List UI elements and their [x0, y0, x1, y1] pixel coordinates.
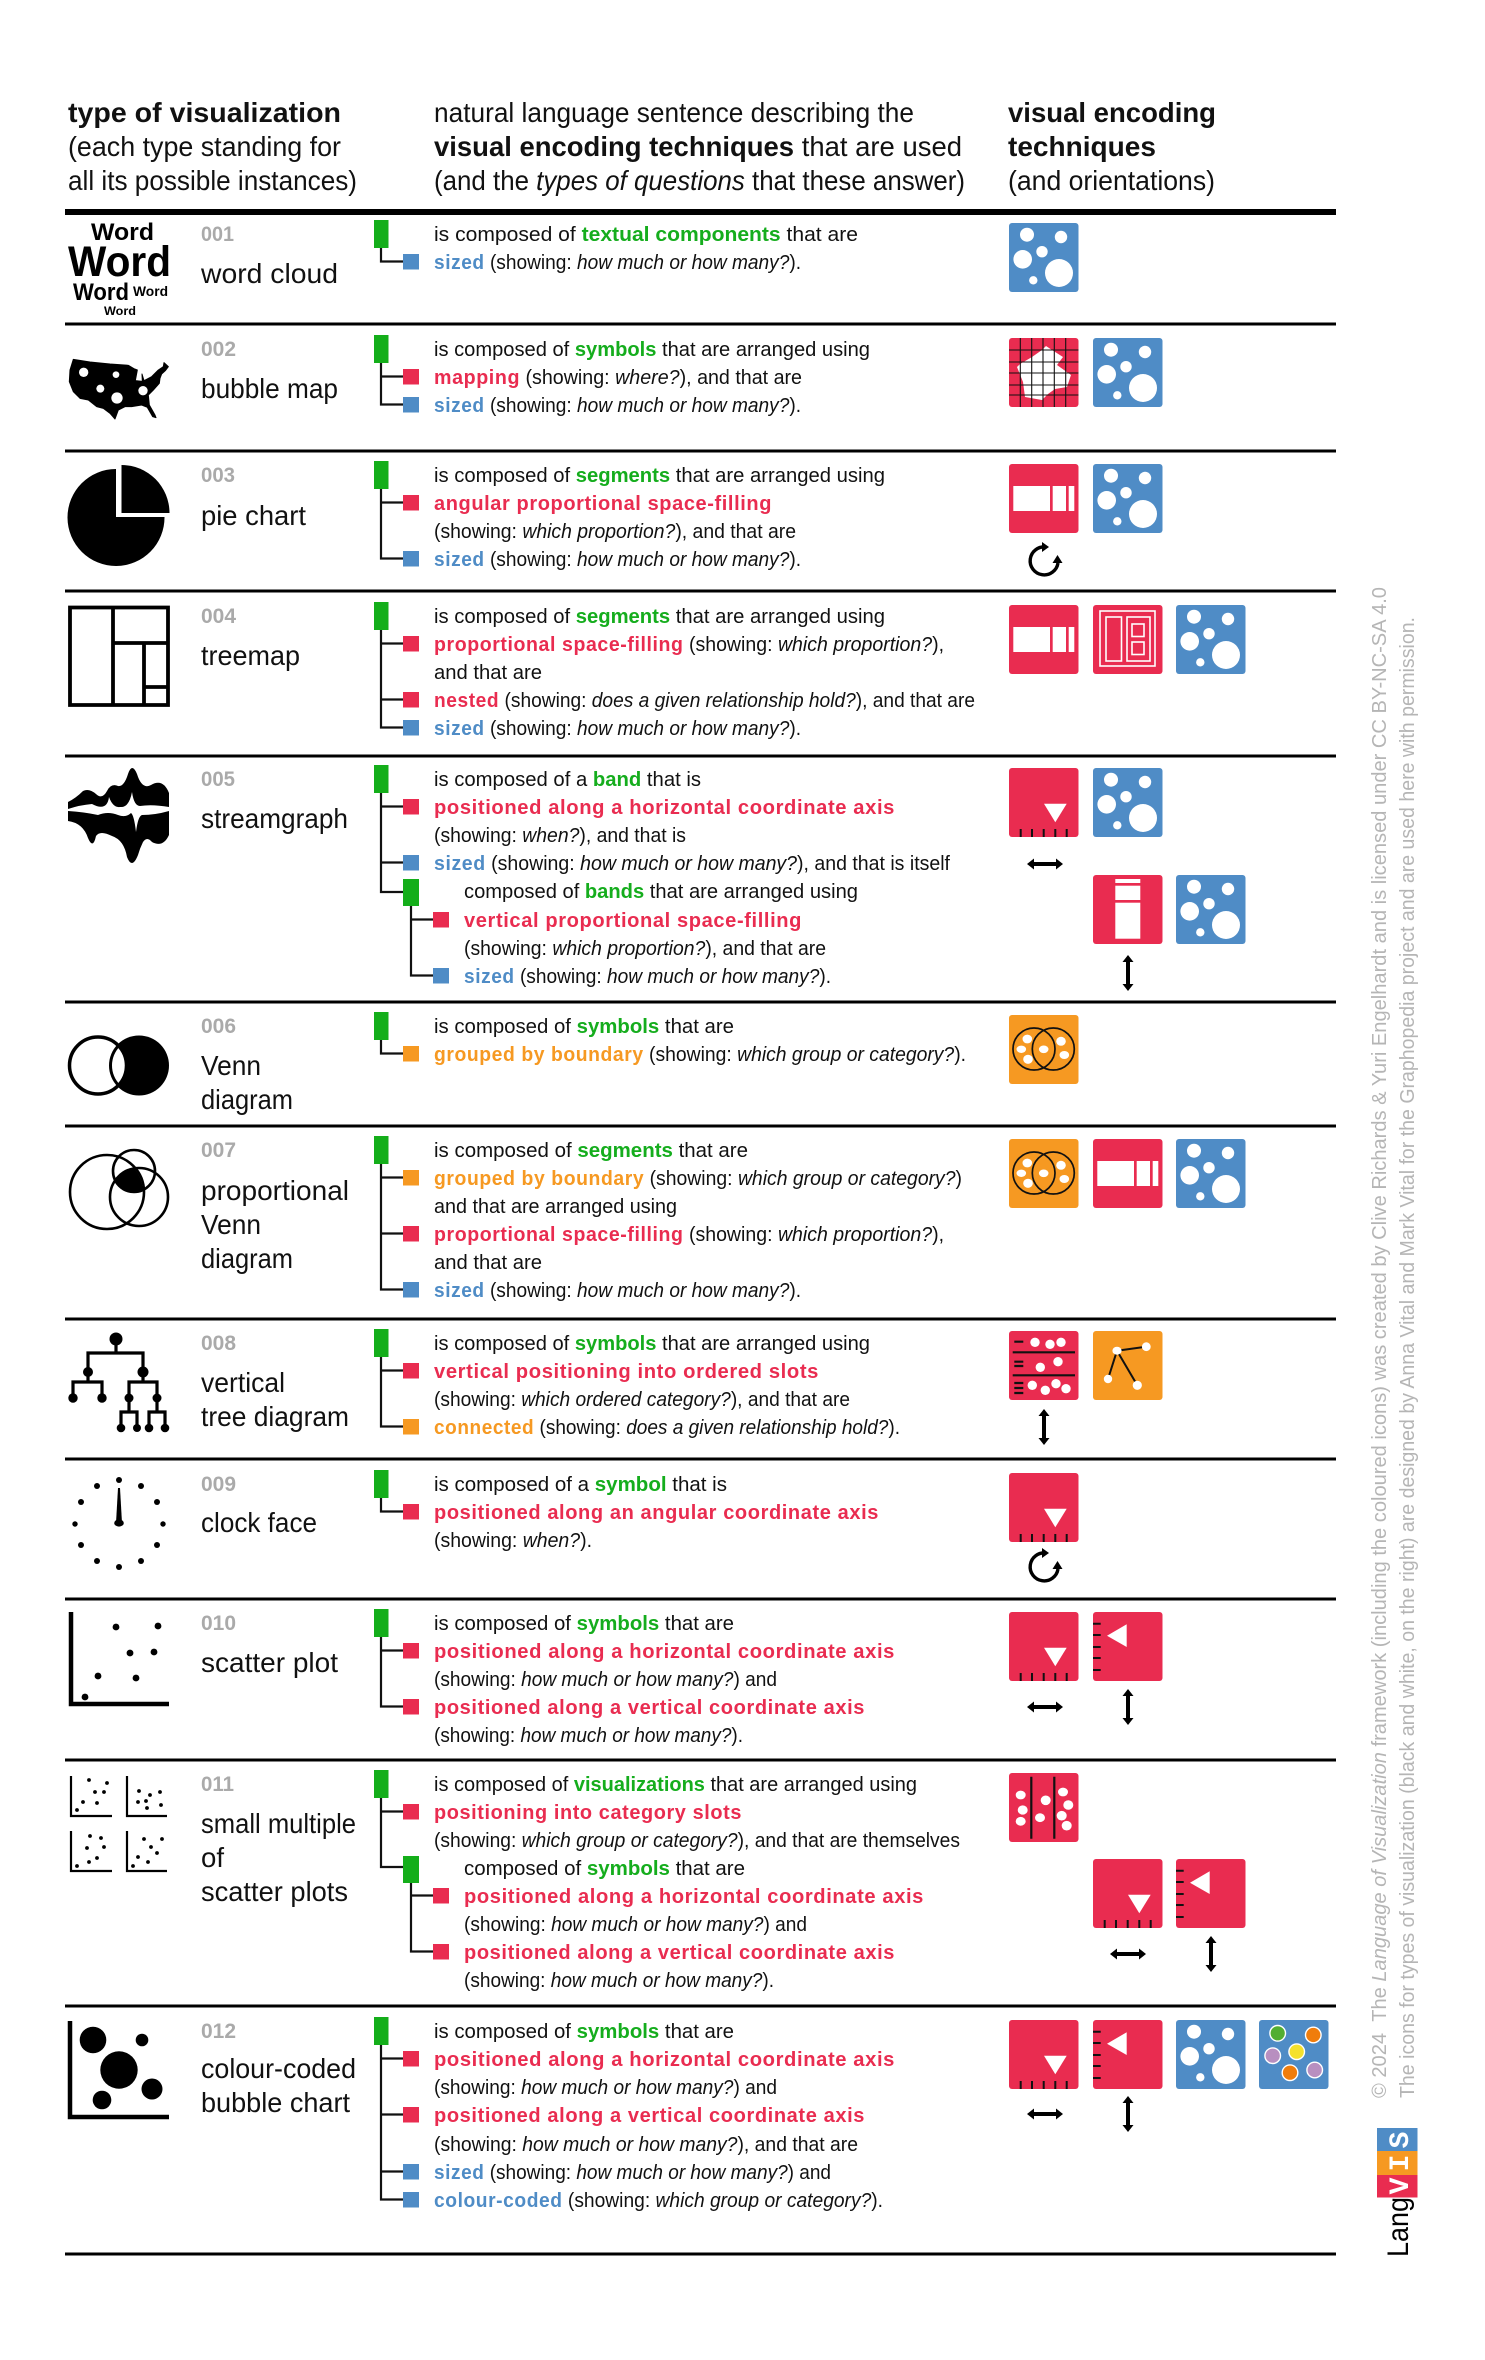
name: vertical tree diagram: [201, 1367, 349, 1432]
encoding icon: sized: [1009, 223, 1078, 292]
sentence: is composed of symbols that are arranged using: [434, 1333, 870, 1355]
sentence: (showing: when?).: [434, 1530, 592, 1552]
sentence: (showing: how much or how many?) and: [434, 1669, 777, 1691]
name: colour-coded bubble chart: bubble chart: [201, 2087, 350, 2118]
icon: clock face: [72, 1477, 166, 1570]
icon: word cloud: Word: [68, 238, 171, 286]
sentence: grouped by boundary (showing: which group or category?): [434, 1168, 962, 1190]
sentence: (showing: when?), and that is: [434, 825, 686, 847]
number 005: 005: [201, 768, 235, 791]
sentence: positioned along a vertical coordinate axis: [464, 1942, 895, 1964]
sentence: sized (showing: how much or how many?).: [434, 252, 801, 274]
icon: pie chart: [68, 465, 170, 566]
encoding tree: [374, 2017, 419, 2208]
encoding tree: [374, 1136, 419, 1298]
encoding tree: [374, 1012, 419, 1062]
sentence: [434, 1140, 962, 1302]
sentence: is composed of visualizations that are arranged using: [434, 1774, 917, 1796]
sentence: (showing: how much or how many?) and: [464, 1914, 807, 1936]
header: natural language sentence: (and the types of questions that these answer): [434, 165, 965, 196]
row 003: pie chart: [68, 461, 1163, 575]
orientation: horizontal: [1110, 1948, 1146, 1960]
sentence: connected (showing: does a given relationship hold?).: [434, 1417, 900, 1439]
icon: Venn diagram: [70, 1036, 169, 1096]
sentence: (showing: which proportion?), and that are: [434, 521, 796, 543]
encoding icon: sized: [1176, 1139, 1246, 1208]
icon: small multiples: [71, 1776, 167, 1871]
name: pie chart: pie chart: [201, 500, 306, 531]
sentence: (showing: how much or how many?).: [434, 1725, 743, 1747]
icon: word cloud: Word: [73, 279, 129, 306]
row 005: streamgraph: [68, 765, 1246, 991]
sentence: and that are: [434, 1252, 542, 1274]
encoding icon: category slots: [1009, 1773, 1078, 1842]
header: visual encoding techniques: techniques: [1008, 131, 1156, 162]
encoding icon: vertical proportional: [1093, 875, 1162, 944]
sentence: is composed of a symbol that is: [434, 1474, 727, 1496]
credits: copyright sidebar: [1369, 587, 1419, 2098]
name: small multiple of scatter plots: of: [201, 1842, 224, 1873]
row 004: treemap: [70, 602, 1246, 740]
name: Venn diagram: [201, 1050, 293, 1115]
encoding tree: [374, 461, 419, 566]
sentence: proportional space-filling (showing: which proportion?),: [434, 634, 944, 656]
icon: vertical tree: [68, 1332, 169, 1432]
icon: scatter plot: [71, 1612, 169, 1704]
sentence: angular proportional space-filling: [434, 493, 772, 515]
name: Venn diagram: diagram: [201, 1084, 293, 1115]
logo: LangVIS: S: [1386, 2132, 1417, 2148]
logo: LangVIS: V: [1386, 2177, 1417, 2194]
name: clock face: clock face: [201, 1507, 317, 1538]
icon: proportional Venn diagram: [70, 1150, 168, 1229]
number 007: 007: [201, 1139, 236, 1162]
sentence: sized (showing: how much or how many?).: [434, 549, 801, 571]
encoding icon: boundary: [1009, 1139, 1078, 1208]
sentence: mapping (showing: where?), and that are: [434, 367, 802, 389]
sentence: (showing: which group or category?), and that are themselves: [434, 1830, 960, 1852]
number 010: 010: [201, 1612, 236, 1635]
icon: word cloud: [68, 219, 171, 318]
header: natural language sentence: natural language sentence describing the: [434, 97, 914, 128]
icon: word cloud: Word: [104, 304, 136, 318]
encoding icon: sized: [1176, 2020, 1246, 2089]
sentence: positioning into category slots: [434, 1802, 742, 1824]
sentence: [434, 606, 975, 740]
row 007: proportional Venn diagram: [70, 1136, 1246, 1302]
encoding icon: horizontal position: [1009, 1612, 1078, 1681]
sentence: sized (showing: how much or how many?).: [464, 966, 831, 988]
encoding icon: sized: [1176, 605, 1246, 674]
number 009: 009: [201, 1473, 236, 1496]
encoding icon: vertical position: [1093, 1612, 1162, 1681]
encoding icon: nested: [1093, 605, 1162, 674]
name: vertical tree diagram: tree diagram: [201, 1401, 349, 1432]
row 006: Venn diagram: [70, 1012, 1078, 1115]
logo: LangVIS: I: [1386, 2155, 1417, 2171]
encoding icon: position: [1009, 1473, 1078, 1542]
name: proportional Venn diagram: proportional: [201, 1175, 349, 1206]
sentence: is composed of segments that are: [434, 1140, 748, 1162]
encoding icon: colour-coded: [1259, 2020, 1328, 2089]
header: visual encoding techniques: visual encoding: [1008, 97, 1216, 128]
encoding icon: vertical position: [1176, 1859, 1246, 1928]
encoding icon: mapping: [1009, 338, 1078, 407]
sentence: is composed of symbols that are arranged using: [434, 339, 870, 361]
sentence: is composed of segments that are arranged using: [434, 465, 885, 487]
sentence: [434, 1613, 895, 1747]
icon: word cloud: Word: [91, 219, 154, 246]
orientation: angular: [1030, 1548, 1062, 1581]
name: vertical tree diagram: vertical: [201, 1367, 285, 1398]
sentence: is composed of segments that are arranged using: [434, 606, 885, 628]
icon: streamgraph: [68, 768, 169, 863]
sentence: is composed of a band that is: [434, 769, 701, 791]
encoding icon: connected: [1093, 1331, 1162, 1400]
sentence: grouped by boundary (showing: which group or category?).: [434, 1044, 966, 1066]
sentence: sized (showing: how much or how many?).: [434, 1280, 801, 1302]
name: proportional Venn diagram: diagram: [201, 1243, 293, 1274]
encoding tree: [374, 1609, 419, 1714]
encoding tree: [374, 1770, 449, 1960]
name: colour-coded bubble chart: colour-coded: [201, 2053, 356, 2084]
credits: copyright sidebar: © 2024 The Language of Visualization framework (including the coloured icons) was created by Clive Richards & Yuri Engelhardt and is licensed under CC BY-NC-SA 4.0: [1369, 587, 1391, 2098]
sentence: [434, 1474, 879, 1552]
sentence: is composed of symbols that are: [434, 1613, 734, 1635]
sentence: sized (showing: how much or how many?), and that is itself: [434, 853, 950, 875]
orientation: vertical: [1122, 1689, 1134, 1725]
name: colour-coded bubble chart: [201, 2053, 356, 2118]
sentence: nested (showing: does a given relationship hold?), and that are: [434, 690, 975, 712]
sentence: positioned along a vertical coordinate axis: [434, 2105, 865, 2127]
sentence: vertical proportional space-filling: [464, 910, 802, 932]
header: type of visualization: [68, 97, 357, 196]
encoding icon: sized: [1093, 338, 1162, 407]
sentence: (showing: which ordered category?), and that are: [434, 1389, 850, 1411]
encoding icon: horizontal position: [1093, 1859, 1162, 1928]
sentence: positioned along a horizontal coordinate axis: [434, 2049, 895, 2071]
encoding icon: vertical position: [1093, 2020, 1162, 2089]
sentence: and that are: [434, 662, 542, 684]
row 002: bubble map: [69, 335, 1162, 419]
orientation: angular: [1030, 542, 1062, 575]
encoding icon: sized: [1176, 875, 1246, 944]
name: bubble map: bubble map: [201, 373, 338, 404]
sentence: colour-coded (showing: which group or category?).: [434, 2190, 883, 2212]
sentence: [434, 1774, 960, 1992]
name: small multiple of scatter plots: scatter plots: [201, 1876, 348, 1907]
sentence: sized (showing: how much or how many?).: [434, 395, 801, 417]
encoding icon: horizontal position: [1009, 768, 1078, 837]
row 010: scatter plot: [71, 1609, 1162, 1747]
row 008: vertical tree diagram: [68, 1329, 1162, 1445]
header: type of visualization: (each type standing for: [68, 131, 341, 162]
encoding icon: proportional segments: [1009, 605, 1078, 674]
sentence: [434, 1333, 900, 1439]
sentence: (showing: how much or how many?), and that are: [434, 2134, 858, 2156]
name: scatter plot: scatter plot: [201, 1647, 338, 1678]
row 009: clock face: [72, 1470, 1079, 1581]
encoding icon: sized: [1093, 464, 1162, 533]
sentence: positioned along a horizontal coordinate axis: [434, 797, 895, 819]
orientation: horizontal: [1027, 858, 1063, 870]
number 012: 012: [201, 2020, 236, 2043]
sentence: vertical positioning into ordered slots: [434, 1361, 819, 1383]
number 001: 001: [201, 223, 234, 246]
encoding icon: proportional segments: [1009, 464, 1078, 533]
header: natural language sentence: visual encoding techniques that are used: [434, 131, 962, 162]
logo: LangVIS: [1377, 2128, 1418, 2257]
orientation: vertical: [1122, 2096, 1134, 2132]
number 008: 008: [201, 1332, 236, 1355]
sentence: composed of symbols that are: [464, 1858, 745, 1880]
encoding icon: proportional segments: [1093, 1139, 1162, 1208]
icon: bubble map: [69, 359, 168, 419]
encoding tree: [374, 765, 449, 984]
sentence: [434, 1016, 966, 1066]
sentence: positioned along a horizontal coordinate axis: [464, 1886, 924, 1908]
icon: treemap: [70, 608, 168, 705]
header: visual encoding techniques: (and orientations): [1008, 165, 1215, 196]
sentence: (showing: how much or how many?).: [464, 1970, 774, 1992]
sentence: [434, 339, 870, 417]
encoding icon: horizontal position: [1009, 2020, 1078, 2089]
encoding icon: sized: [1093, 768, 1162, 837]
sentence: positioned along a horizontal coordinate axis: [434, 1641, 895, 1663]
number 011: 011: [201, 1773, 234, 1796]
sentence: [434, 769, 950, 988]
header: type of visualization: all its possible instances): [68, 165, 357, 196]
credits: copyright sidebar: The icons for types of visualization (black and white, on the right) are designed by Anna Vital and Mark Vital for the Graphopedia project and are used here with permission.: [1397, 617, 1419, 2098]
name: streamgraph: streamgraph: [201, 803, 348, 834]
number 006: 006: [201, 1015, 236, 1038]
orientation: horizontal: [1027, 1702, 1063, 1712]
sentence: (showing: how much or how many?) and: [434, 2077, 777, 2099]
icon: word cloud: Word: [133, 283, 168, 299]
encoding tree: [374, 602, 419, 736]
header: visual encoding techniques: [1008, 97, 1216, 196]
row 012: colour-coded bubble chart: [70, 2017, 1328, 2212]
encoding tree: [374, 220, 419, 270]
name: proportional Venn diagram: Venn: [201, 1209, 261, 1240]
encoding tree: [374, 1329, 419, 1434]
icon: bubble chart: [70, 2021, 169, 2117]
orientation: vertical: [1038, 1409, 1050, 1445]
sentence: [434, 2021, 895, 2212]
sentence: [434, 224, 858, 274]
name: treemap: treemap: [201, 640, 300, 671]
number 003: 003: [201, 464, 235, 487]
sentence: is composed of symbols that are: [434, 2021, 734, 2043]
encoding tree: [374, 1470, 419, 1520]
sentence: positioned along a vertical coordinate axis: [434, 1697, 865, 1719]
sentence: sized (showing: how much or how many?).: [434, 718, 801, 740]
orientation: vertical: [1122, 955, 1134, 991]
sentence: composed of bands that are arranged using: [464, 881, 858, 903]
row 011: small multiple of scatter plots: [71, 1770, 1246, 1992]
header: type of visualization: type of visualization: [68, 97, 341, 128]
sentence: is composed of textual components that are: [434, 224, 858, 246]
header: natural language sentence: [434, 97, 965, 196]
orientation: vertical: [1206, 1936, 1216, 1972]
name: Venn diagram: Venn: [201, 1050, 261, 1081]
sentence: proportional space-filling (showing: which proportion?),: [434, 1224, 944, 1246]
name: small multiple of scatter plots: [201, 1808, 356, 1907]
sentence: and that are arranged using: [434, 1196, 677, 1218]
sentence: sized (showing: how much or how many?) and: [434, 2162, 831, 2184]
name: word cloud: word cloud: [200, 258, 338, 289]
logo: LangVIS: Lang: [1382, 2197, 1415, 2257]
sentence: is composed of symbols that are: [434, 1016, 734, 1038]
number 004: 004: [201, 605, 236, 628]
encoding icon: ordered slots: [1009, 1331, 1078, 1400]
row 001: word cloud: [68, 219, 1078, 318]
encoding icon: boundary: [1009, 1015, 1078, 1084]
number 002: 002: [201, 338, 236, 361]
name: small multiple of scatter plots: small multiple: [201, 1808, 356, 1839]
sentence: [434, 465, 885, 571]
name: proportional Venn diagram: [201, 1175, 349, 1274]
orientation: horizontal: [1027, 2108, 1063, 2120]
sentence: positioned along an angular coordinate axis: [434, 1502, 879, 1524]
encoding tree: [374, 335, 419, 412]
sentence: (showing: which proportion?), and that are: [464, 938, 826, 960]
